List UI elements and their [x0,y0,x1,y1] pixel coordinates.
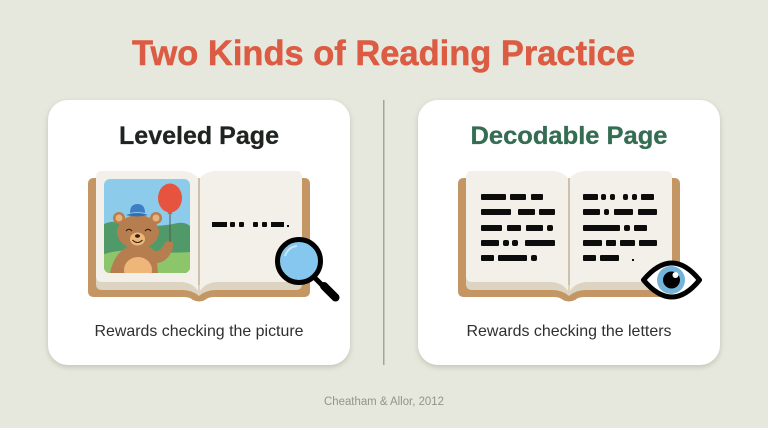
hat [126,213,148,216]
title: Two Kinds of Reading Practice [132,34,635,73]
heading: decodable page: Decodable Page [470,122,668,150]
caption: decodable page: Rewards checking the letters [466,323,672,340]
panel: leveled page [48,100,350,365]
open book with bear picture [88,171,310,302]
caption: leveled page: Rewards checking the picture [94,323,304,340]
bear body [110,243,173,273]
center divider [383,100,384,365]
heading: leveled page: Leveled Page [119,122,279,150]
scribbled text line [212,222,289,227]
balloon [170,214,171,242]
open book with text [458,171,680,302]
icon: eye [644,263,700,297]
illustration: bear with balloon [104,179,190,283]
icon: magnifying glass [278,240,336,298]
text lines: left page [481,194,555,261]
text lines: right page [583,194,657,261]
source citation: Cheatham & Allor, 2012 [324,396,444,408]
card background [48,100,350,365]
panel: decodable page [418,100,720,365]
card background [418,100,720,365]
